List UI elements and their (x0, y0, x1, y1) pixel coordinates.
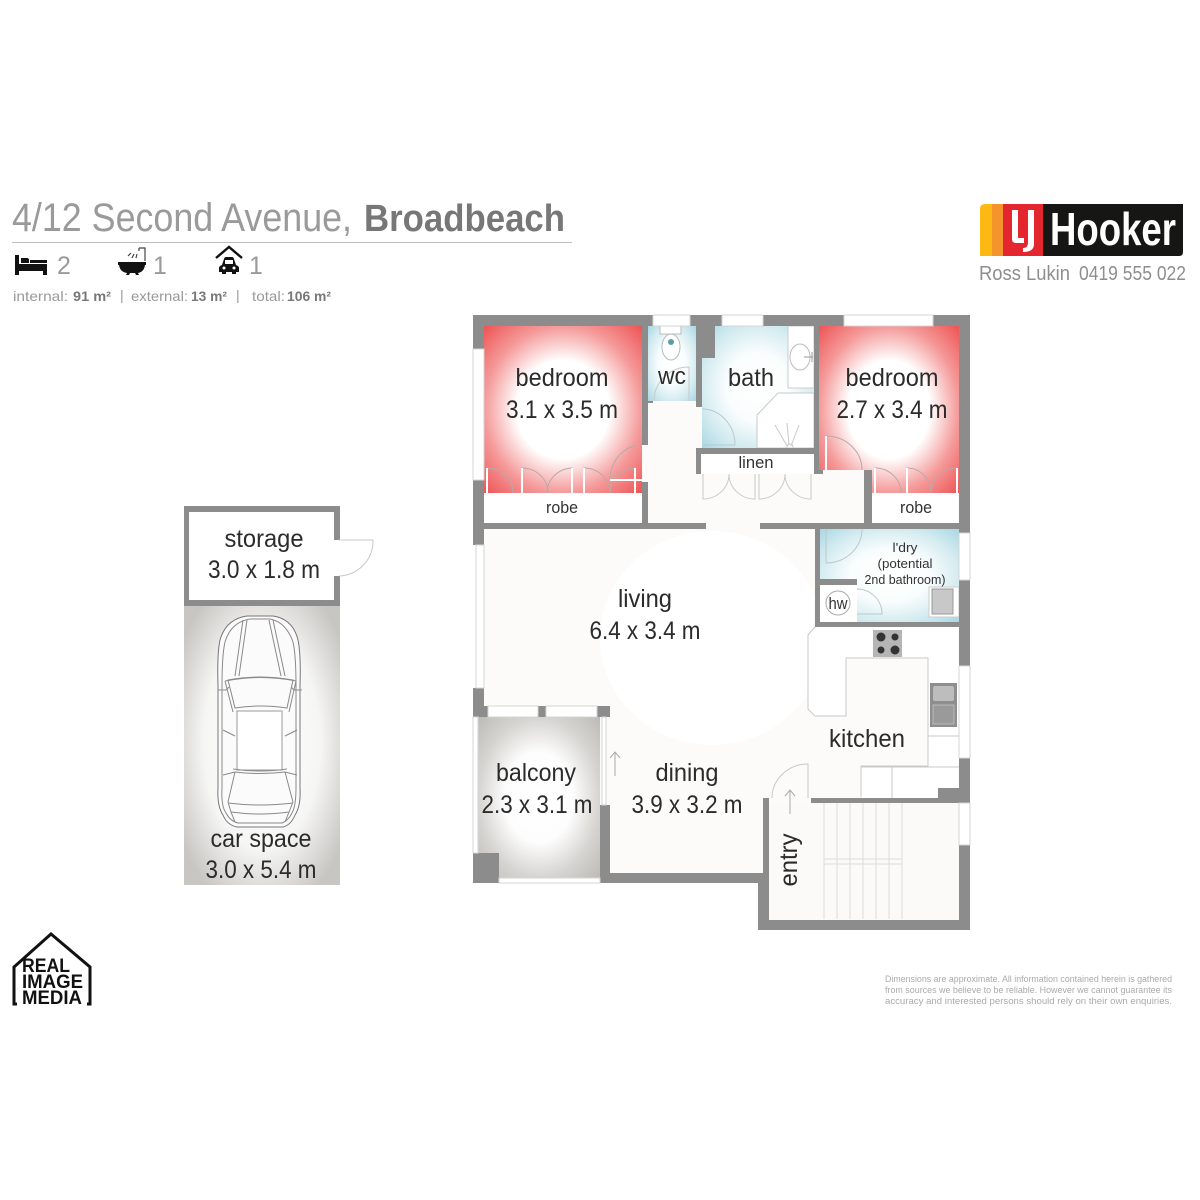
panel: apartment floor plan (473, 315, 970, 930)
area summary: external: (131, 288, 188, 304)
walls (473, 315, 970, 930)
agent contact (979, 263, 1186, 285)
area summary: | (120, 287, 124, 303)
room: balcony: balcony (496, 759, 576, 787)
room: bedroom 2: 2.7 x 3.4 m (836, 396, 948, 424)
laundry sink (929, 587, 959, 617)
area summary: 91 m² (73, 288, 111, 304)
disclaimer: from sources we believe to be reliable. However we cannot guarantee its (885, 985, 1172, 995)
room: laundry: (potential (878, 557, 932, 571)
room: hot water (820, 585, 857, 622)
icon: bath count: 1 (153, 252, 167, 280)
room: robe 2 (872, 493, 959, 523)
area summary: internal: (13, 288, 68, 304)
stairs (824, 803, 902, 919)
room: robe 2: robe (900, 498, 932, 517)
icon: bed count (15, 252, 71, 280)
icon: garage count: 1 (249, 252, 263, 280)
room: linen: linen (738, 453, 774, 472)
storage room: storage (224, 525, 304, 553)
title: Broadbeach (364, 198, 565, 240)
room: bath (702, 326, 814, 450)
panel: car space and storage: car space (210, 825, 312, 853)
room: robe 1: robe (546, 498, 578, 517)
room: dining label: 3.9 x 3.2 m (632, 791, 742, 819)
area summary: 13 m² (191, 288, 227, 304)
kitchen sink (930, 683, 957, 727)
disclaimer: Dimensions are approximate. All information contained herein is gathered (885, 974, 1172, 984)
panel: car space and storage: 3.0 x 5.4 m (206, 856, 316, 884)
room: laundry (820, 529, 959, 622)
panel: car space and storage (184, 506, 373, 885)
title: 4/12 Second Avenue, (12, 196, 352, 240)
title (12, 196, 572, 243)
room: bedroom 1: bedroom (516, 364, 608, 392)
icon: garage count (216, 247, 263, 280)
room: bedroom 2: bedroom (846, 364, 938, 392)
room: linen (701, 453, 814, 499)
room: balcony: 2.3 x 3.1 m (482, 791, 592, 819)
area summary: total: (252, 288, 285, 304)
Real Image Media logo: IMAGE (22, 972, 83, 993)
room: bedroom 2 (819, 326, 959, 493)
room: bath: bath (728, 364, 774, 392)
Real Image Media logo: REAL (22, 956, 70, 977)
storage room (184, 506, 373, 606)
room: entry: entry (775, 833, 803, 886)
LJ Hooker logo (980, 203, 1183, 256)
room: wc (648, 326, 696, 401)
disclaimer (885, 974, 1172, 1006)
room: bedroom 1 (484, 326, 648, 493)
room: dining label (632, 759, 742, 819)
room: balcony (478, 717, 600, 878)
room: kitchen (808, 627, 959, 798)
disclaimer: accuracy and interested persons should rely on their own enquiries. (885, 996, 1172, 1006)
area summary: 106 m² (287, 288, 331, 304)
area summary (13, 287, 331, 304)
room: entry (772, 764, 808, 886)
room: bedroom 1: 3.1 x 3.5 m (506, 396, 618, 424)
Real Image Media logo (14, 934, 90, 1009)
Real Image Media logo: MEDIA (22, 988, 82, 1009)
room: kitchen: kitchen (829, 725, 905, 753)
agent contact: 0419 555 022 (1079, 263, 1186, 285)
cooktop (873, 630, 902, 657)
room: laundry: 2nd bathroom) (864, 573, 946, 587)
area summary: | (236, 287, 240, 303)
arrow: sliding door (610, 752, 620, 776)
room: living label (590, 585, 700, 645)
agent contact: Ross Lukin (979, 263, 1070, 285)
room: living label: living (618, 585, 672, 613)
room: laundry: l'dry (892, 541, 918, 555)
icon: bath count (118, 248, 167, 280)
windows and sliding door (473, 315, 970, 883)
car drawing (218, 616, 302, 827)
room: wc: wc (657, 363, 686, 390)
car space floor (184, 600, 340, 885)
icon: bed count: 2 (57, 252, 71, 280)
room: living label: 6.4 x 3.4 m (590, 617, 700, 645)
room: robe 1 (484, 493, 642, 523)
storage room: 3.0 x 1.8 m (208, 556, 320, 584)
room: dining label: dining (656, 759, 718, 787)
floors (484, 326, 959, 920)
room: hot water: hw (828, 594, 848, 613)
